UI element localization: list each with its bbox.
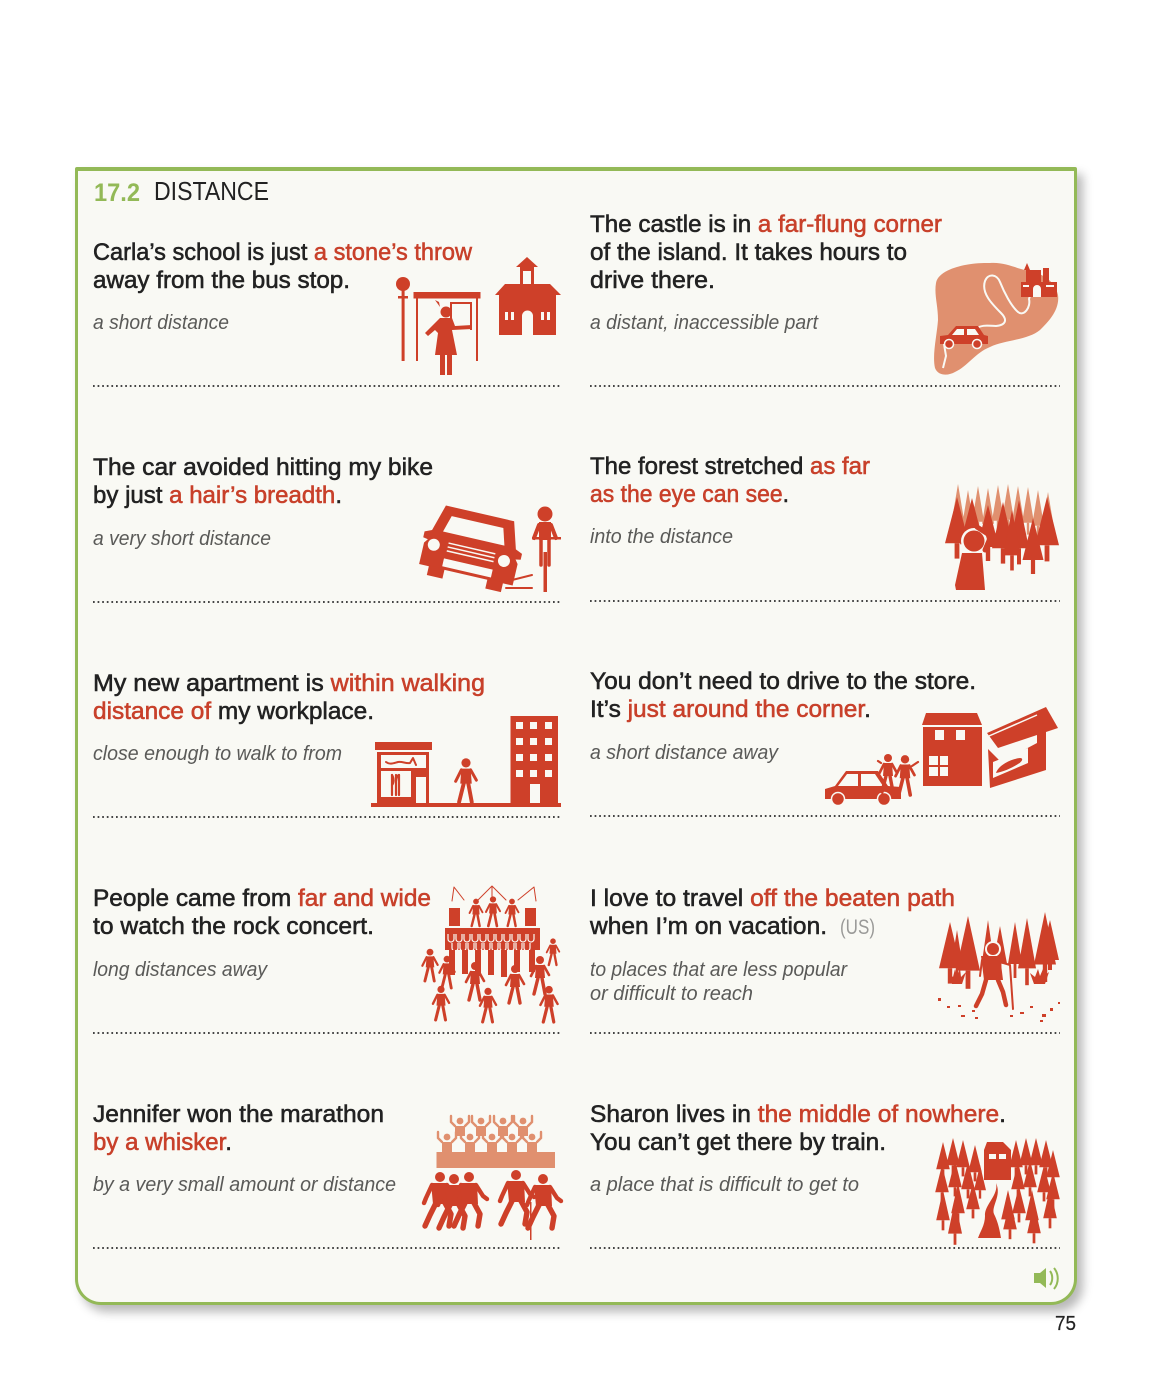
sentence: to watch the rock concert.	[93, 913, 374, 940]
entry: by a whisker	[93, 1101, 562, 1248]
entry: off the beaten path	[589, 885, 1060, 1033]
icon: car and cyclist	[415, 502, 561, 595]
sentence	[590, 1101, 1006, 1156]
sentence: It’s just around the corner.	[590, 696, 871, 723]
definition: by a very small amount or distance	[93, 1174, 396, 1196]
icon: car, people, house and bakery	[825, 707, 1058, 806]
sentence	[589, 885, 955, 940]
sentence: drive there.	[590, 267, 715, 294]
sentence: The forest stretched as far	[590, 453, 870, 480]
section heading: DISTANCE	[154, 176, 269, 206]
definition: a short distance	[93, 312, 229, 334]
sentence: The car avoided hitting my bike	[93, 454, 433, 481]
sentence: The castle is in a far-flung corner	[590, 211, 942, 238]
icon: house in forest with winding road	[935, 1138, 1060, 1245]
entry: just around the corner	[590, 668, 1060, 816]
definition	[590, 959, 848, 1005]
page number: 75	[1055, 1313, 1076, 1335]
icon: hiker in forest	[938, 912, 1060, 1022]
sentence: You can’t get there by train.	[590, 1129, 886, 1156]
definition: to places that are less popular	[590, 959, 848, 981]
icon: restaurant, walker and office block	[371, 716, 561, 807]
panel: distance card	[75, 167, 1077, 1305]
definition: or difficult to reach	[590, 983, 753, 1005]
icon: audio speaker	[1034, 1268, 1058, 1289]
sentence: Sharon lives in the middle of nowhere.	[590, 1101, 1006, 1128]
entry: a far-flung corner	[590, 211, 1060, 386]
icon: island with road, car and castle	[934, 263, 1058, 375]
icon: person looking at forest	[945, 484, 1059, 590]
section heading: 17.2	[94, 179, 140, 207]
sentence: People came from far and wide	[93, 885, 431, 912]
entry: a hair's breadth	[93, 454, 562, 602]
entry: the middle of nowhere	[590, 1101, 1060, 1248]
definition: a short distance away	[590, 742, 779, 764]
sentence	[93, 885, 431, 940]
sentence: distance of my workplace.	[93, 698, 374, 725]
sentence: when I’m on vacation.	[589, 913, 827, 940]
sentence: My new apartment is within walking	[93, 670, 485, 697]
entry: a stone's throw	[93, 239, 562, 386]
definition: a place that is difficult to get to	[590, 1174, 859, 1196]
definition: close enough to walk to from	[93, 743, 342, 765]
sentence	[93, 239, 473, 294]
sentence: by just a hair’s breadth.	[93, 482, 342, 509]
icon: rock concert crowd	[422, 886, 559, 1022]
entry: within walking distance of	[93, 670, 562, 817]
definition: into the distance	[590, 526, 733, 548]
definition: a distant, inaccessible part	[590, 312, 819, 334]
entry: as far as the eye can see	[590, 453, 1060, 601]
sentence: of the island. It takes hours to	[590, 239, 907, 266]
sentence	[590, 668, 976, 723]
entry: far and wide	[93, 885, 562, 1033]
definition: long distances away	[93, 959, 268, 981]
sentence: Jennifer won the marathon	[93, 1101, 384, 1128]
icon: marathon finish with spectators	[424, 1116, 561, 1240]
section heading	[94, 176, 269, 207]
sentence	[590, 453, 870, 508]
sentence: away from the bus stop.	[93, 267, 350, 294]
sentence	[590, 211, 942, 294]
sentence	[93, 454, 433, 509]
sentence: as the eye can see.	[590, 481, 789, 508]
sentence	[93, 1101, 384, 1156]
sentence: by a whisker.	[93, 1129, 232, 1156]
sentence: I love to travel off the beaten path	[590, 885, 955, 912]
sentence: You don’t need to drive to the store.	[590, 668, 976, 695]
sentence	[93, 670, 485, 725]
definition: a very short distance	[93, 528, 271, 550]
sentence: (US)	[840, 916, 875, 939]
icon: girl at bus stop and school	[396, 257, 561, 375]
sentence: Carla’s school is just a stone’s throw	[93, 239, 473, 266]
